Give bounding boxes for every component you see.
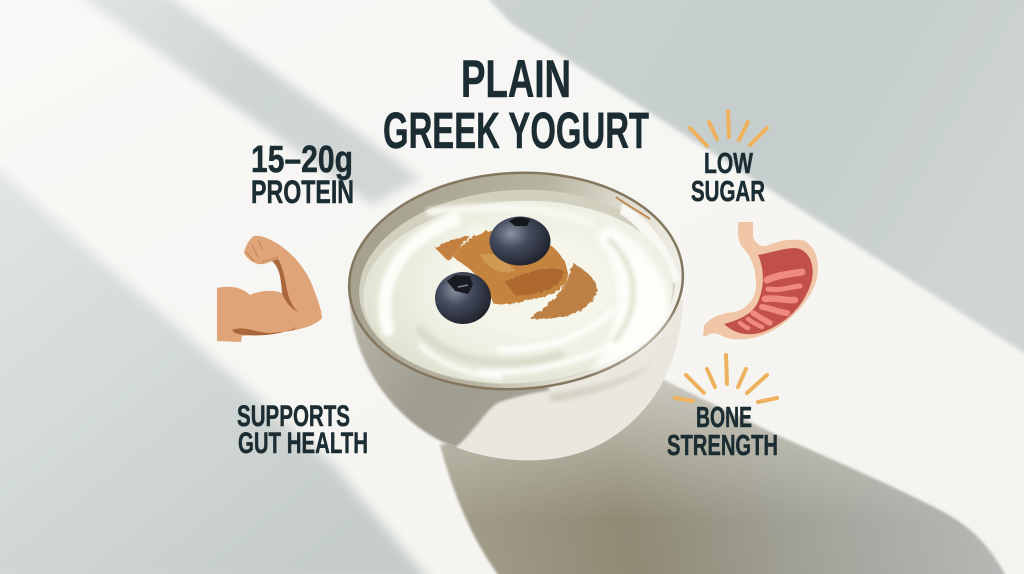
label: gut health: SUPPORTS [237,400,350,433]
blueberry: left [435,272,491,324]
label: low sugar [691,148,765,208]
window shadow: diagonal band [72,0,420,205]
label: bone strength [667,402,778,462]
icon: sunburst above low sugar [690,111,767,146]
stomach outer wall [703,222,818,339]
title: GREEK YOGURT [383,102,649,159]
fist lines [246,240,278,262]
inner wall of bowl [354,182,680,392]
yogurt swirls [385,208,633,378]
stomach folds [740,272,802,328]
label: bone strength: BONE [696,402,752,434]
bowl rim [344,164,688,398]
label: protein: 15–20g [251,139,353,181]
bowl body shaded side [350,300,550,447]
yogurt bowl [344,164,688,460]
sunlit yogurt right side [590,225,669,372]
label: low sugar: LOW [704,148,753,180]
stomach inner lining [724,248,813,334]
window shadow: top right [480,0,1024,362]
title [383,50,649,159]
title: PLAIN [461,50,571,109]
central yogurt mound [447,225,612,336]
label: bone strength: STRENGTH [667,430,778,462]
arm muscle shading [232,259,298,335]
cinnamon [435,231,597,319]
label: protein [251,139,354,210]
label: low sugar: SUGAR [691,176,765,208]
icon: stomach [703,222,818,339]
blueberry: top [490,216,550,266]
label: gut health: GUT HEALTH [238,427,368,460]
label: protein: PROTEIN [251,174,354,210]
rim rust marks [616,197,650,219]
icon: sunburst above bone strength [675,355,777,402]
sunlit wedge on rim [620,204,680,285]
yogurt surface [358,193,678,391]
bowl cast shadow [440,376,1008,574]
window shadow: lower left [0,160,432,574]
bowl body, lit base [350,300,683,460]
bowl body soft shade under rim [550,364,652,402]
icon: flexed arm [217,236,322,342]
label: gut health [237,400,368,460]
